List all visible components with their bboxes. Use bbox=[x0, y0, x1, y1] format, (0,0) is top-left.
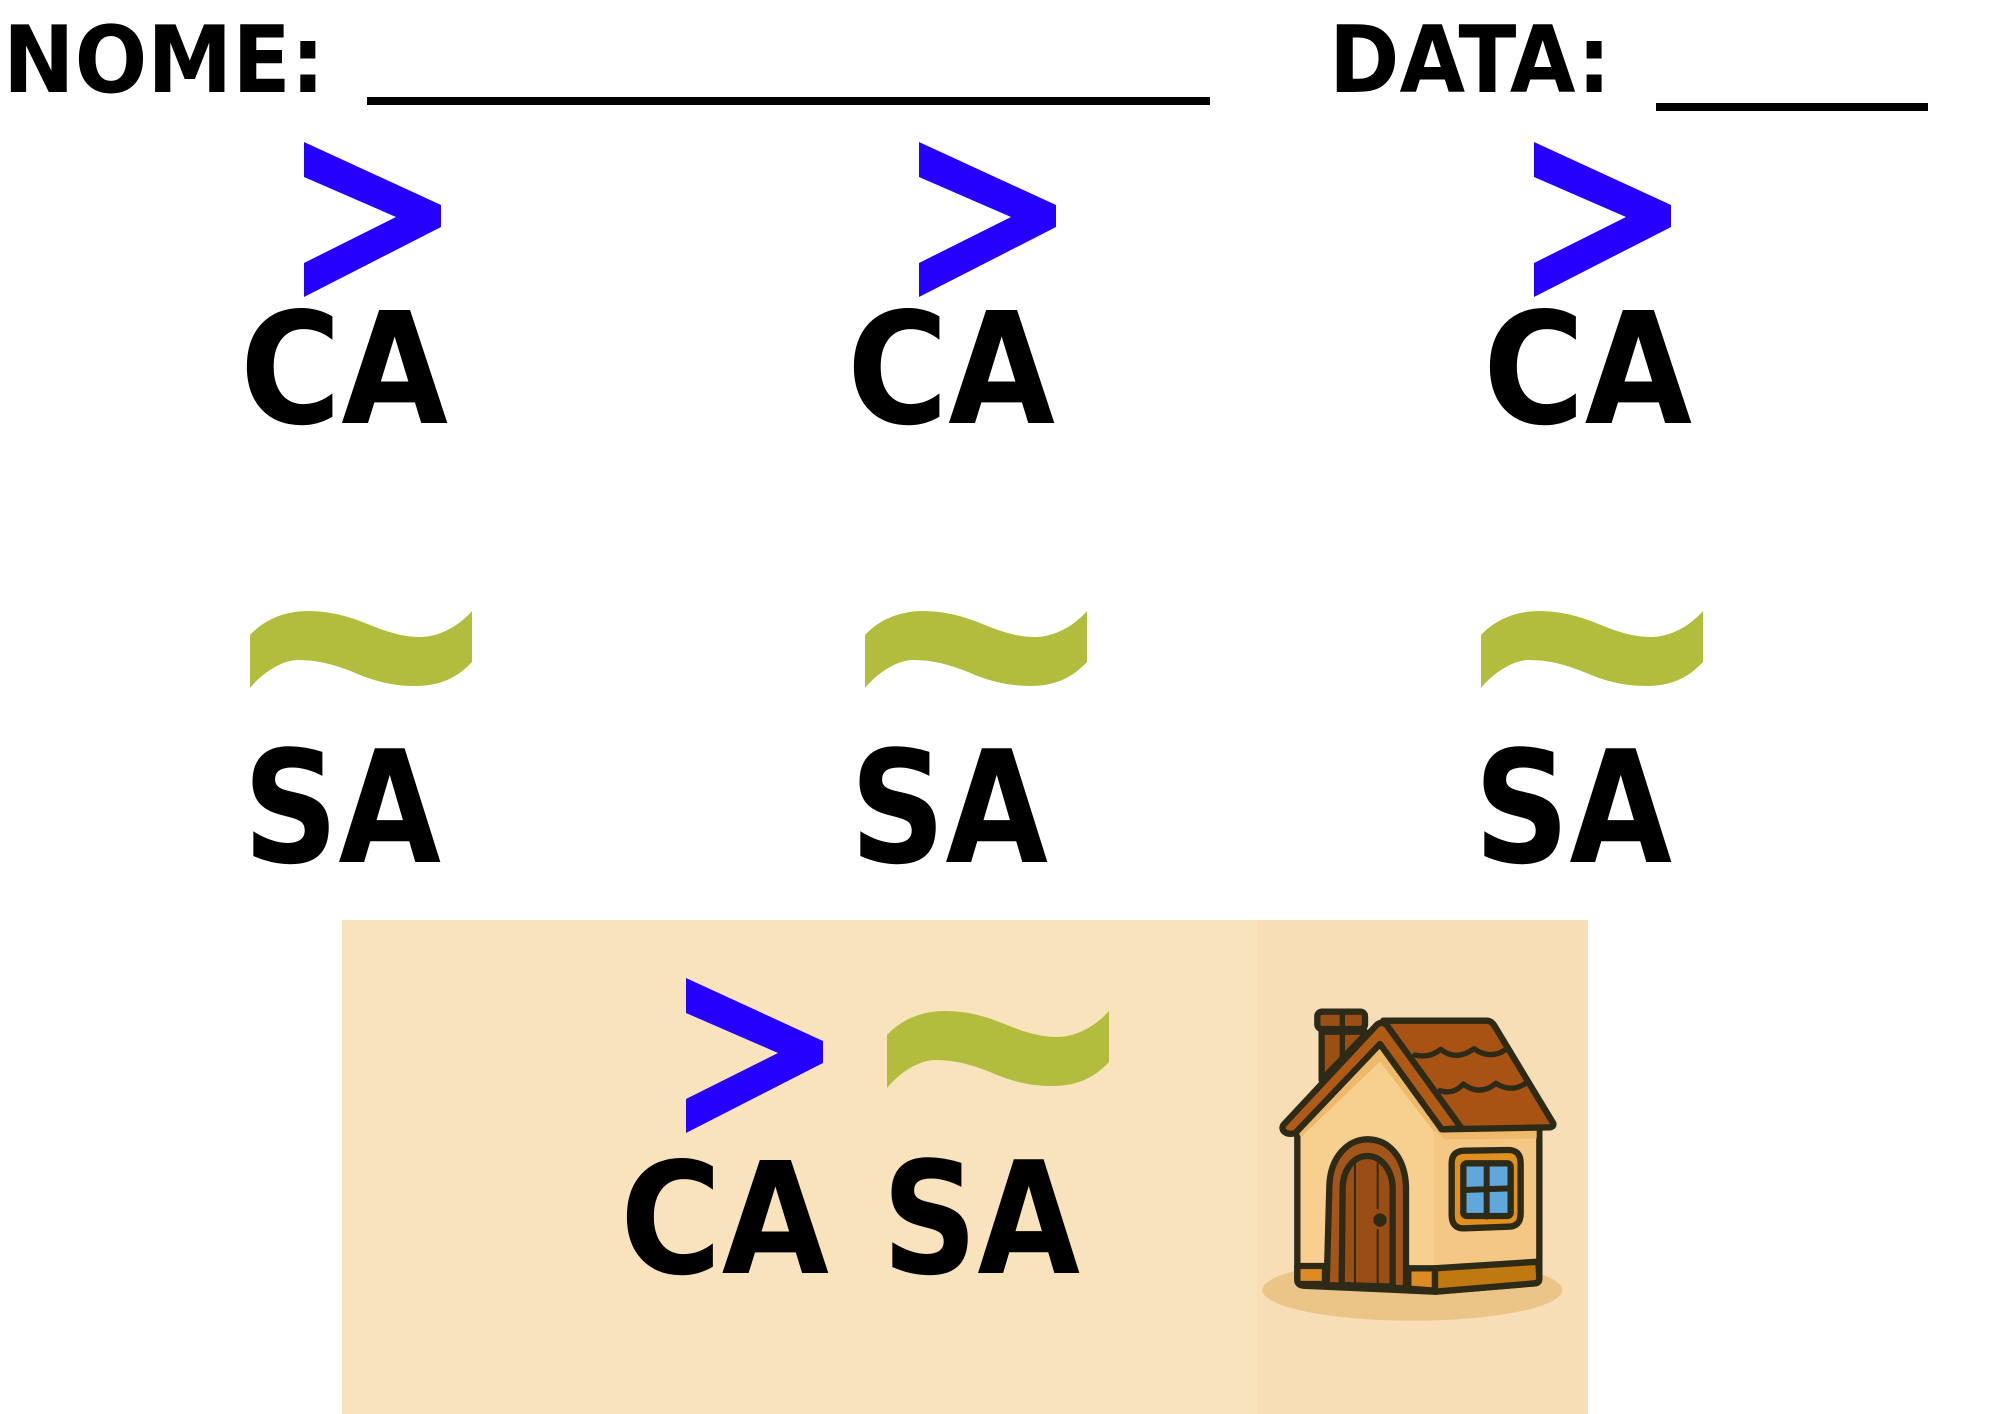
header: date field bbox=[1329, 6, 1928, 114]
column 3: syllable SA bbox=[1474, 611, 1703, 899]
column 1: syllable SA bbox=[243, 611, 472, 899]
word: CA: CA bbox=[620, 1129, 829, 1310]
header: name field: NOME: bbox=[3, 6, 325, 114]
header: date field: DATA: bbox=[1329, 6, 1611, 114]
header: name field bbox=[3, 6, 1210, 114]
word: CA bbox=[620, 978, 829, 1310]
panel: word CASA with house bbox=[342, 920, 1588, 1414]
column 2: syllable CA bbox=[847, 142, 1056, 460]
word: SA: SA bbox=[882, 1128, 1080, 1310]
column 1: syllable CA bbox=[240, 142, 448, 460]
icon: house bbox=[1262, 1012, 1562, 1321]
column 1: syllable CA: CA bbox=[240, 279, 448, 460]
word: SA bbox=[882, 1011, 1109, 1310]
column 2: syllable CA: CA bbox=[847, 279, 1055, 460]
column 2: syllable SA: SA bbox=[850, 717, 1048, 899]
column 3: syllable CA: CA bbox=[1483, 279, 1692, 460]
column 1: syllable SA: SA bbox=[243, 717, 441, 899]
column 3: syllable SA: SA bbox=[1474, 717, 1672, 899]
column 2: syllable SA bbox=[850, 611, 1087, 899]
column 3: syllable CA bbox=[1483, 142, 1692, 460]
